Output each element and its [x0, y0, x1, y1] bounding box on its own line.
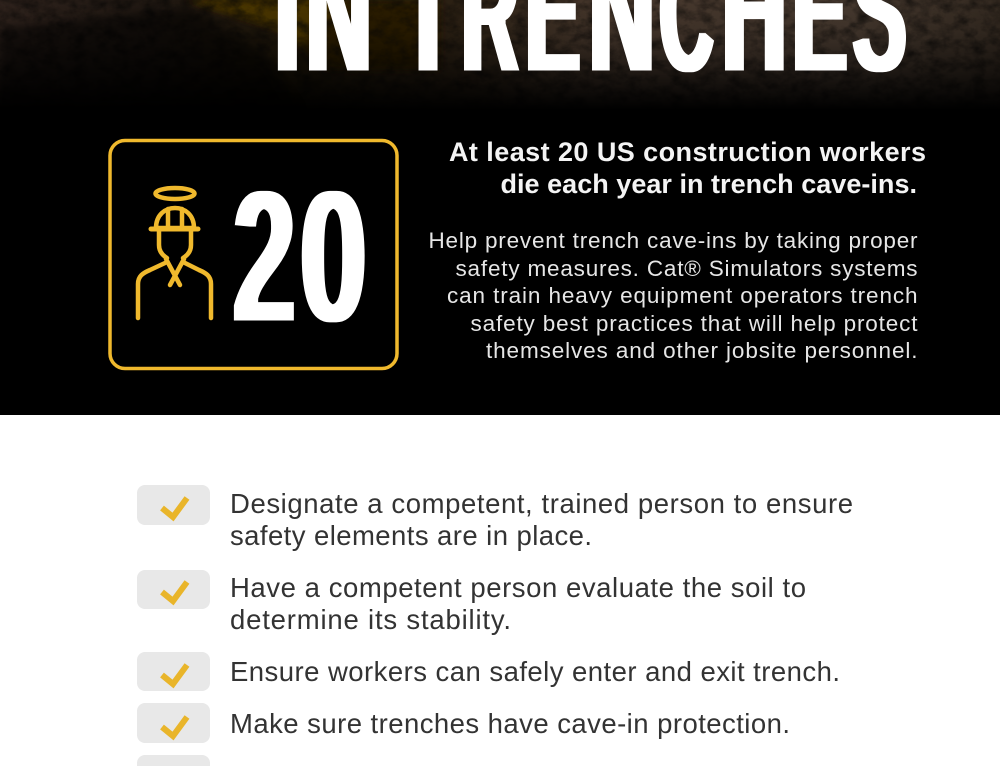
body text: prevention: themselves and other jobsite personnel. [486, 338, 918, 363]
item 1: safety elements are in place. [230, 520, 592, 551]
panel: dark header [0, 0, 1000, 415]
number 20: 2 [233, 151, 295, 363]
item 3: Ensure workers can safely enter and exit trench. [230, 656, 840, 687]
item 4: Make sure trenches have cave-in protection. [230, 708, 790, 739]
item 2: Have a competent person evaluate the soil to [230, 572, 806, 603]
photo background: soil fading to black [0, 0, 1000, 110]
heading: annual deaths: At least 20 US construction workers [449, 137, 926, 167]
number 20 [233, 150, 367, 363]
body text: prevention: can train heavy equipment operators trench [447, 283, 918, 308]
stat box: 20 workers [110, 140, 397, 368]
body text: prevention: safety best practices that will help protect [470, 311, 918, 336]
item 5: cropped at page edge [137, 755, 575, 766]
item 1: Designate a competent, trained person to ensure [230, 488, 853, 519]
icon: construction worker with halo [138, 188, 211, 318]
item 4 [137, 703, 790, 743]
body text: prevention [428, 228, 918, 363]
body text: prevention: Help prevent trench cave-ins by taking proper [428, 228, 918, 253]
item 2: determine its stability. [230, 604, 511, 635]
number 20: 0 [300, 150, 367, 363]
item 3 [137, 652, 840, 691]
panel: safety checklist [137, 485, 853, 766]
item 2 [137, 570, 806, 635]
heading: annual deaths [449, 137, 926, 199]
item 1 [137, 485, 853, 551]
heading: annual deaths: die each year in trench cave-ins. [500, 169, 917, 199]
body text: prevention: safety measures. Cat® Simulators systems [456, 256, 918, 281]
title [275, 0, 906, 110]
